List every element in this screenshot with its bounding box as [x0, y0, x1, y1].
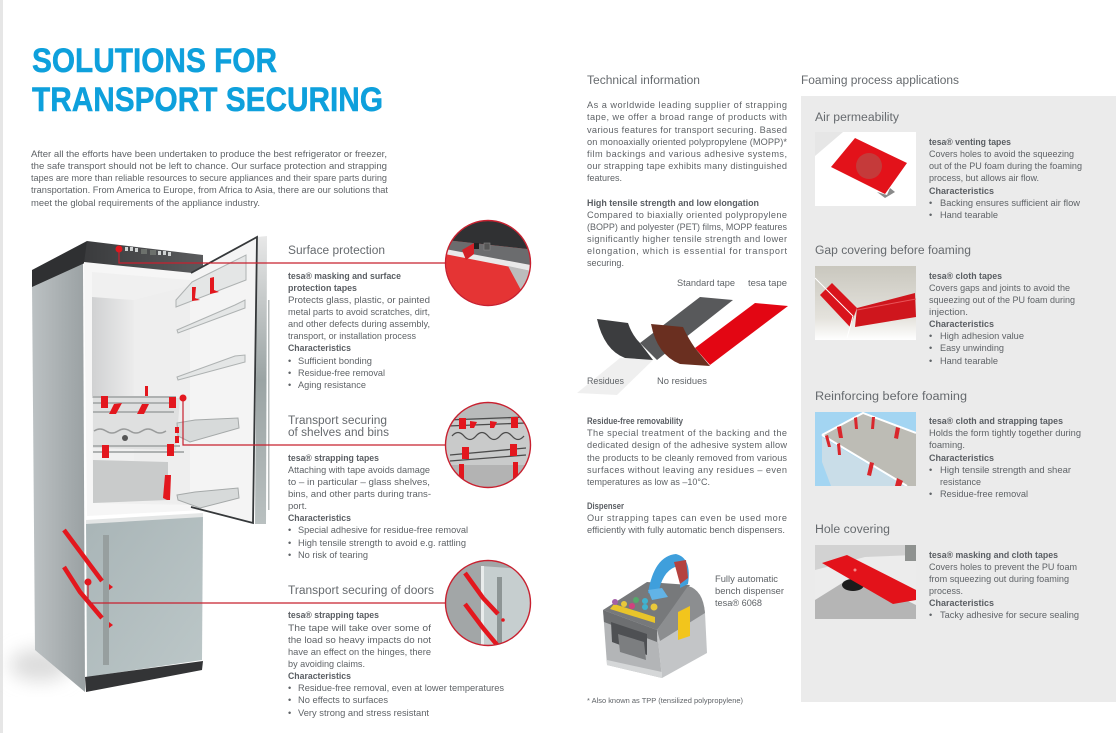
residue-free paragraph [587, 416, 787, 487]
intro paragraph: film backings and various adhesive systems, [587, 149, 787, 159]
text [929, 137, 1082, 220]
intro text: the safe transport should not be left to chance. Our surface protection and strapping [31, 161, 387, 171]
characteristics: High tensile strength to avoid e.g. rattling [298, 538, 466, 548]
heading: Transport securing of doors [288, 585, 434, 597]
tape comparison diagram: Residues [587, 376, 624, 386]
characteristics: No effects to surfaces [298, 695, 388, 705]
image: cloth tape in corner [815, 266, 916, 340]
tape comparison diagram [577, 278, 788, 395]
dispenser paragraph: Our strapping tapes can even be used more [587, 513, 787, 523]
characteristics: • [288, 356, 291, 366]
section: doors [288, 585, 504, 718]
residue-free paragraph: dedicated design of the adhesive system allow [587, 440, 787, 450]
text: Characteristics [929, 319, 994, 329]
front slot [611, 622, 647, 655]
leader line: shelves [180, 394, 447, 445]
characteristics [288, 671, 504, 718]
intro paragraph: on monoaxially oriented polypropylene (MOPP)* [587, 137, 787, 147]
callout circle: shelves detail [444, 402, 532, 488]
intro paragraph: various features for transport securing. Based [587, 125, 787, 135]
dispenser paragraph [587, 501, 787, 535]
text: Backing ensures sufficient air flow [940, 198, 1080, 208]
text: Hand tearable [940, 356, 998, 366]
residue-free paragraph: the products to be cleanly removed from various [587, 453, 787, 463]
card: air permeability [815, 112, 1082, 220]
dispenser caption: Fully automatic [715, 574, 778, 584]
intro paragraph [587, 100, 787, 183]
open door [190, 237, 257, 524]
characteristics: Characteristics [288, 343, 351, 353]
description [288, 453, 431, 511]
intro paragraph: features. [587, 173, 622, 183]
characteristics: Characteristics [288, 671, 351, 681]
leader line: surface protection [116, 246, 447, 263]
text: Covers holes to avoid the squeezing [929, 149, 1074, 159]
intro paragraph: As a worldwide leading supplier of strapping [587, 100, 787, 110]
description [288, 610, 432, 669]
tensile strength paragraph: elongation, which is essential for transport [587, 246, 787, 256]
card: hole covering: Hole covering [815, 524, 890, 536]
text: • [929, 210, 932, 220]
text [929, 271, 1075, 366]
text: • [929, 343, 932, 353]
leader line: doors [84, 578, 447, 603]
text: Characteristics [929, 598, 994, 608]
characteristics: • [288, 683, 291, 693]
text: Characteristics [929, 186, 994, 196]
fridge top band [32, 241, 87, 287]
text: tesa® venting tapes [929, 137, 1011, 147]
text: High adhesion value [940, 331, 1024, 341]
text: Characteristics [929, 453, 994, 463]
description: port. [288, 501, 307, 511]
text: • [929, 331, 932, 341]
description: metal parts to avoid scratches, dirt, [288, 307, 430, 317]
description: and other defects during assembly, [288, 319, 430, 329]
card: air permeability: Air permeability [815, 112, 899, 124]
residue-free paragraph: Residue-free removability [587, 416, 683, 426]
door shelves [176, 255, 246, 380]
characteristics: • [288, 525, 291, 535]
description: Attaching with tape avoids damage [288, 465, 430, 475]
text: tesa® masking and cloth tapes [929, 550, 1058, 560]
heading [288, 415, 389, 439]
characteristics: Residue-free removal [298, 368, 385, 378]
intro paragraph: our strapping tape exhibits many distinguished [587, 161, 787, 171]
section: shelves and bins [288, 415, 468, 560]
door bins [177, 418, 239, 508]
text: Hand tearable [940, 210, 998, 220]
title [32, 42, 383, 119]
dispenser caption: bench dispenser [715, 586, 784, 596]
heading: of shelves and bins [288, 427, 389, 439]
text: tesa® cloth tapes [929, 271, 1002, 281]
red straps on door [64, 530, 102, 618]
text: tesa® cloth and strapping tapes [929, 416, 1063, 426]
characteristics: Aging resistance [298, 380, 366, 390]
description: bins, and other parts during trans- [288, 489, 431, 499]
characteristics: Sufficient bonding [298, 356, 372, 366]
tensile strength paragraph [587, 198, 787, 268]
tape comparison diagram: Standard tape [677, 278, 735, 288]
lower door [86, 515, 203, 677]
tape comparison diagram: tesa tape [748, 278, 787, 288]
handle [103, 535, 109, 665]
characteristics: Very strong and stress resistant [298, 708, 429, 718]
description: tesa® strapping tapes [288, 610, 379, 620]
characteristics: Residue-free removal, even at lower temperatures [298, 683, 504, 693]
text: foaming. [929, 440, 965, 450]
text: Covers gaps and joints to avoid the [929, 283, 1070, 293]
callout circle: surface protection detail [444, 220, 532, 306]
standard tape [640, 297, 733, 360]
intro paragraph: tape, we offer a broad range of products with [587, 112, 787, 122]
description: to – in particular – glass shelves, [288, 477, 430, 487]
tape roll [648, 554, 689, 595]
warning label [678, 606, 690, 640]
column: technical information [577, 75, 788, 705]
tensile strength paragraph: securing. [587, 258, 624, 268]
characteristics: Special adhesive for residue-free removal [298, 525, 468, 535]
dispenser paragraph: Dispenser [587, 501, 624, 511]
intro text: tapes are more than reliable resources to secure appliances and their spare parts during [31, 173, 387, 183]
heading: Technical information [587, 75, 700, 87]
text: process. [929, 586, 963, 596]
residue-free paragraph: surfaces without leaving any residues – even [587, 465, 787, 475]
heading: Transport securing [288, 415, 387, 427]
description: tesa® strapping tapes [288, 453, 379, 463]
floor shadow [10, 649, 70, 681]
tensile strength paragraph: significantly higher tensile strength and lower [587, 234, 787, 244]
card: reinforcing: Reinforcing before foaming [815, 391, 967, 403]
internal shelves [93, 397, 184, 452]
title: TRANSPORT SECURING [32, 81, 383, 119]
text: Covers holes to prevent the PU foam [929, 562, 1077, 572]
tensile strength paragraph: High tensile strength and low elongation [587, 198, 759, 208]
image: tape over hole [815, 545, 916, 619]
description: tesa® masking and surface [288, 271, 401, 281]
right housing [657, 586, 707, 678]
front housing [603, 610, 662, 678]
description: The tape will take over some of [288, 623, 432, 633]
fridge side [32, 262, 85, 692]
text: • [929, 356, 932, 366]
image: venting tape [815, 132, 916, 206]
tesa tape [695, 303, 788, 365]
text: injection. [929, 307, 968, 317]
characteristics [288, 343, 385, 390]
description: Protects glass, plastic, or painted [288, 295, 430, 305]
description: by avoiding claims. [288, 659, 365, 669]
top panel [603, 582, 690, 630]
tape comparison diagram: No residues [657, 376, 707, 386]
characteristics: • [288, 538, 291, 548]
characteristics: • [288, 695, 291, 705]
text [929, 416, 1081, 499]
image: foam mould with tape [815, 412, 916, 486]
description: have an effect on the hinges, there [288, 647, 431, 657]
characteristics: • [288, 368, 291, 378]
refrigerator illustration [10, 236, 270, 692]
dispenser image [603, 554, 707, 678]
heading: Surface protection [288, 245, 385, 257]
text: Holds the form tightly together during [929, 428, 1081, 438]
characteristics: No risk of tearing [298, 550, 368, 560]
red tapes on shelves [101, 277, 219, 500]
footnote: * Also known as TPP (tensilized polypropylene) [587, 698, 743, 705]
text [929, 550, 1079, 620]
card: gap covering [815, 245, 1075, 366]
text: squeezing out of the PU foam during [929, 295, 1075, 305]
panel: foaming process [801, 96, 1116, 702]
description: transport, or installation process [288, 331, 416, 341]
base [85, 661, 203, 692]
intro text: transportation. From America to Europe, from Africa to Asia, there are our solutions that [31, 185, 388, 195]
heading: foaming process applications: Foaming process applications [801, 75, 959, 87]
text: • [929, 465, 932, 475]
text: Tacky adhesive for secure sealing [940, 610, 1079, 620]
residue trace [577, 358, 653, 395]
yellow strip [610, 604, 655, 623]
text: • [929, 198, 932, 208]
characteristics [288, 513, 468, 560]
text: resistance [940, 477, 981, 487]
text: High tensile strength and shear [940, 465, 1071, 475]
text: process, but allows air flow. [929, 173, 1039, 183]
text: from squeezing out during foaming [929, 574, 1069, 584]
residue-free paragraph: temperatures as low as –10°C. [587, 477, 710, 487]
title: SOLUTIONS FOR [32, 42, 277, 80]
tensile strength paragraph: Compared to biaxially oriented polypropylene [587, 210, 787, 220]
text: Easy unwinding [940, 343, 1004, 353]
buttons [612, 599, 618, 605]
characteristics: • [288, 708, 291, 718]
control panel [125, 247, 171, 256]
card: hole covering [815, 524, 1079, 620]
fridge frame and interior [84, 262, 203, 516]
intro text [31, 149, 388, 208]
description: protection tapes [288, 283, 357, 293]
dispenser caption: tesa® 6068 [715, 598, 762, 608]
text: • [929, 610, 932, 620]
card: gap covering: Gap covering before foaming [815, 245, 971, 257]
characteristics: Characteristics [288, 513, 351, 523]
dispenser paragraph: efficiently with fully automatic bench dispensers. [587, 525, 785, 535]
section: surface protection [288, 245, 430, 390]
residue-free paragraph: The special treatment of the backing and the [587, 428, 787, 438]
callout circle: door detail [444, 560, 532, 646]
description [288, 271, 430, 341]
text: Residue-free removal [940, 489, 1028, 499]
description: the load so heavy impacts do not [288, 635, 431, 645]
dispenser caption [715, 574, 784, 608]
intro text: After all the efforts have been undertaken to produce the best refrigerator or freezer, [31, 149, 387, 159]
characteristics: • [288, 550, 291, 560]
tensile strength paragraph: (BOPP) and polyester (PET) films, MOPP features [587, 222, 787, 232]
intro text: meet the global requirements of the appliance industry. [31, 198, 260, 208]
text: out of the PU foam during the foaming [929, 161, 1082, 171]
card: reinforcing [815, 391, 1081, 499]
text: • [929, 489, 932, 499]
characteristics: • [288, 380, 291, 390]
